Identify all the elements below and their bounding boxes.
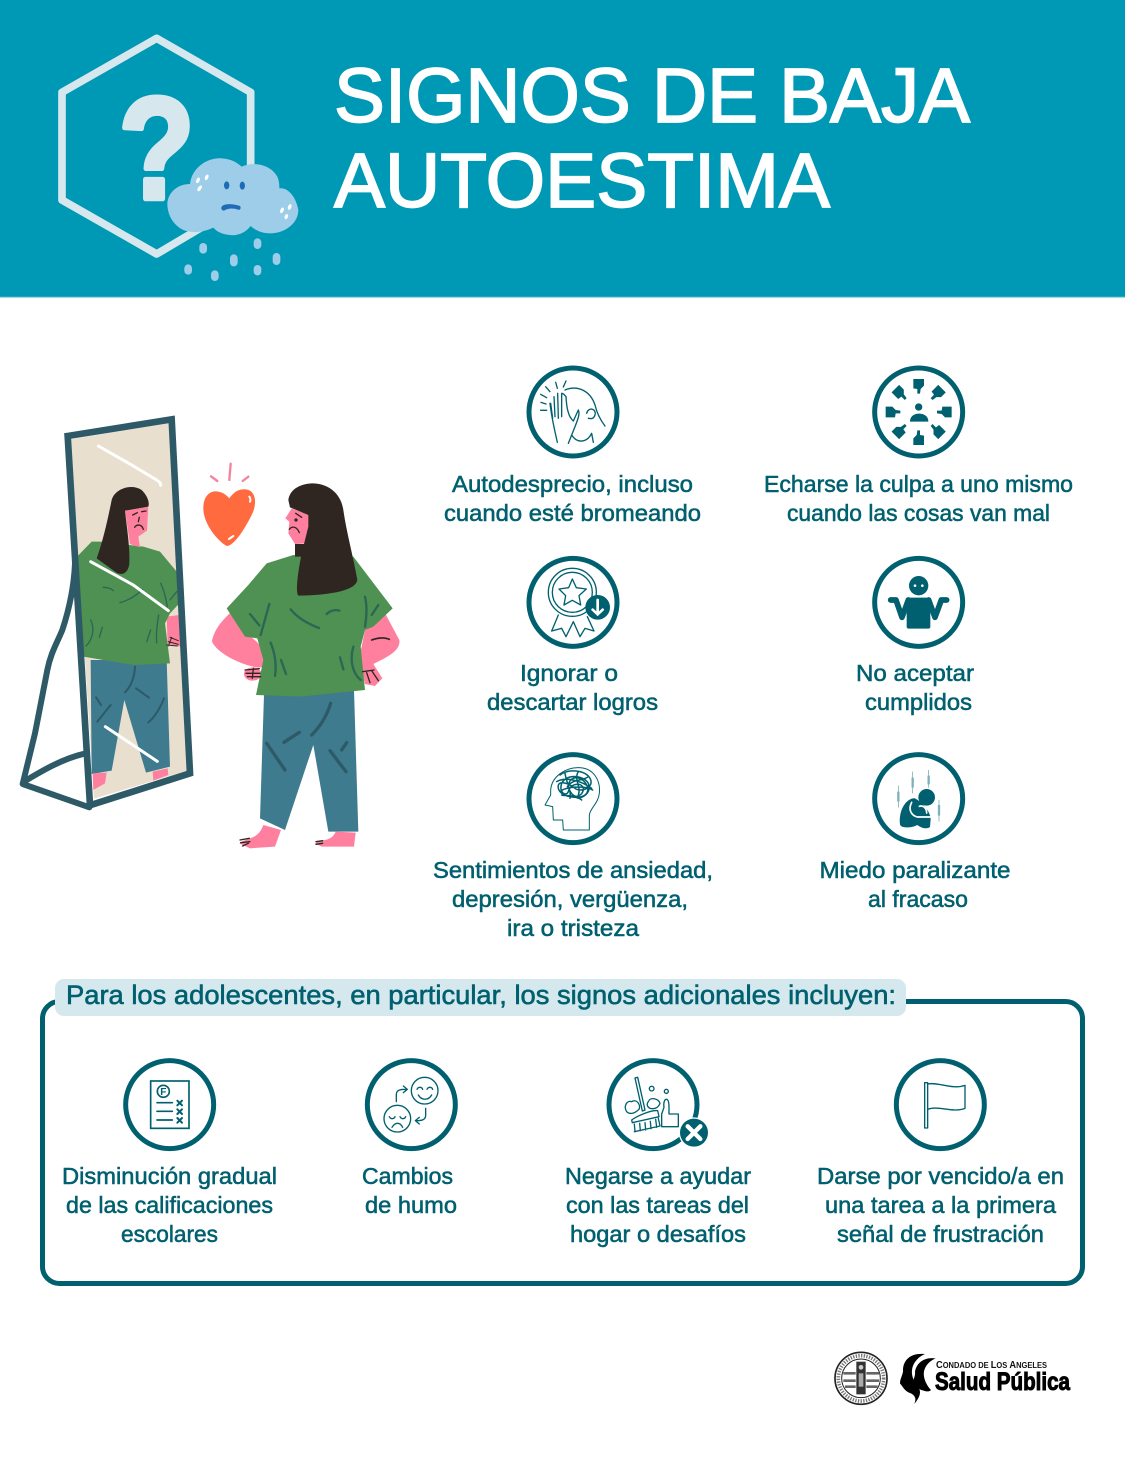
text — [565, 1163, 751, 1247]
text — [856, 660, 974, 715]
title — [334, 53, 971, 224]
text: cuando las cosas van mal — [787, 500, 1050, 526]
logo: county seal and Salud Publica: Salud Pública — [935, 1368, 1071, 1396]
text — [817, 1163, 1064, 1247]
panel heading: Para los adolescentes, en particular, los signos adicionales incluyen: — [66, 980, 896, 1010]
woman figure — [212, 483, 399, 848]
text: depresión, vergüenza, — [452, 886, 688, 912]
text: cumplidos — [865, 689, 972, 715]
icon: award ribbon with down arrow — [529, 558, 617, 646]
icon: failed exam: F — [160, 1087, 166, 1098]
icon: silhouettes — [900, 1354, 936, 1404]
icon: hexagon with question mark and sad cloud — [62, 38, 298, 281]
sign: echarse la culpa — [764, 368, 1073, 526]
icon: shrugging person — [875, 558, 963, 646]
icon: county seal — [835, 1352, 887, 1404]
sign: no aceptar cumplidos — [856, 558, 974, 715]
panel: teen signs — [42, 979, 1082, 1284]
text: No aceptar — [856, 660, 974, 686]
text — [444, 471, 701, 526]
icon: pointing hands around a person — [875, 368, 963, 456]
text: de humo — [365, 1192, 457, 1218]
illustration: woman looking at mirror — [23, 419, 399, 848]
icon: failed exam — [126, 1061, 214, 1149]
text: escolares — [121, 1221, 218, 1247]
text: Sentimientos de ansiedad, — [433, 857, 713, 883]
text: Disminución gradual — [62, 1163, 277, 1189]
title: SIGNOS DE BAJA — [334, 53, 971, 139]
text: Negarse a ayudar — [565, 1163, 751, 1189]
sign: autodesprecio — [444, 368, 701, 526]
icon: hand on forehead — [529, 368, 617, 456]
text — [433, 857, 713, 941]
sign: sentimientos — [433, 755, 713, 941]
text — [487, 660, 658, 715]
text — [62, 1163, 277, 1247]
icon: head with tangled thoughts — [529, 755, 617, 843]
item: mood swings — [362, 1061, 457, 1218]
icon: sad and happy faces with arrows — [367, 1061, 455, 1149]
title: AUTOESTIMA — [334, 138, 831, 224]
text: Miedo paralizante — [820, 857, 1010, 883]
text: de las calificaciones — [66, 1192, 273, 1218]
sign: ignorar logros — [487, 558, 658, 715]
text: con las tareas del — [566, 1192, 749, 1218]
item: chores — [565, 1061, 751, 1247]
text: al fracaso — [868, 886, 968, 912]
text: descartar logros — [487, 689, 658, 715]
logo: county seal and Salud Publica — [835, 1352, 1071, 1404]
text: una tarea a la primera — [825, 1192, 1057, 1218]
text: ira o tristeza — [507, 915, 640, 941]
text: cuando esté bromeando — [444, 500, 701, 526]
icon: broom and dustpan with X — [609, 1061, 709, 1149]
mirror stand — [23, 563, 89, 807]
sign: miedo al fracaso — [820, 755, 1010, 912]
mirror glass and reflection — [71, 423, 187, 799]
text — [820, 857, 1010, 912]
logo: county seal and Salud Publica: CONDADO DE LOS ANGELES — [936, 1359, 1047, 1371]
item: grades — [62, 1061, 277, 1247]
icon: flag — [896, 1061, 984, 1149]
text — [764, 471, 1073, 526]
text: Echarse la culpa a uno mismo — [764, 471, 1073, 497]
text: señal de frustración — [837, 1221, 1044, 1247]
item: giving up — [817, 1061, 1064, 1247]
text — [362, 1163, 457, 1218]
mirror frame — [68, 419, 190, 805]
icon: heart — [203, 464, 255, 546]
text: Cambios — [362, 1163, 453, 1189]
text: Ignorar o — [520, 660, 618, 686]
header banner — [0, 0, 1125, 298]
text: Darse por vencido/a en — [817, 1163, 1064, 1189]
text: hogar o desafíos — [570, 1221, 746, 1247]
icon: hexagon with question mark and sad cloud: ? — [119, 67, 195, 230]
icon: curled up figure — [875, 755, 963, 843]
text: Autodesprecio, incluso — [452, 471, 693, 497]
